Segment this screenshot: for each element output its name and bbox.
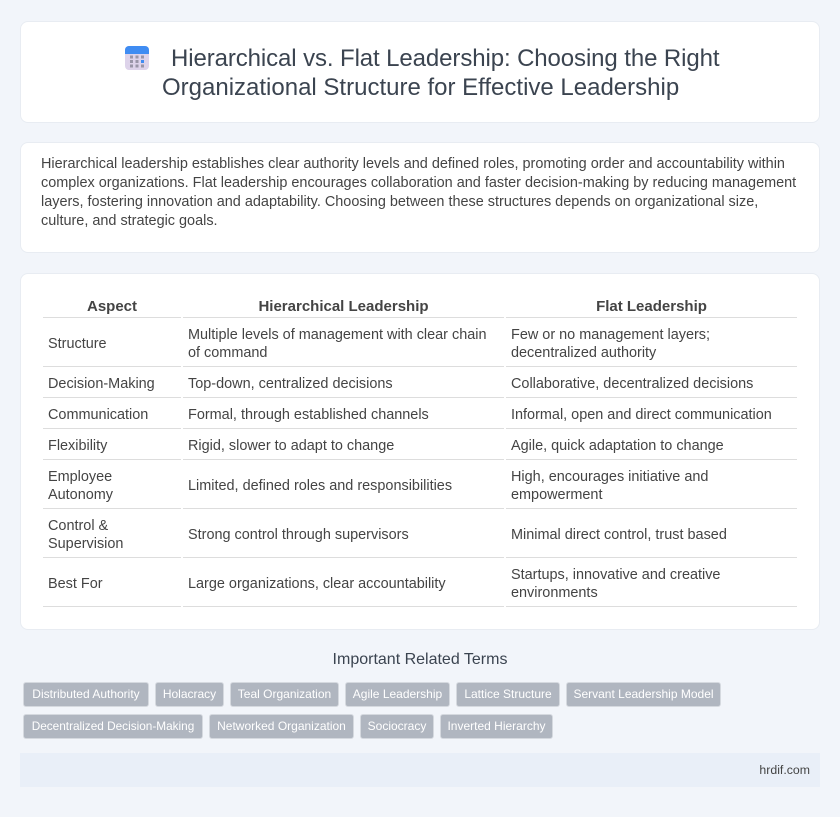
row: Best For: environments	[511, 585, 598, 601]
table header: Hierarchical Leadership	[258, 298, 429, 315]
table header	[87, 298, 707, 315]
row: Structure: Few or no management layers;	[511, 327, 710, 343]
row: Employee Autonomy: Limited, defined roles and responsibilities	[188, 478, 452, 494]
panel: introduction	[20, 142, 820, 253]
related terms tags: Decentralized Decision-Making	[32, 719, 194, 733]
related terms tags: Sociocracy	[368, 719, 426, 733]
row: Best For: Large organizations, clear accountability	[188, 576, 446, 592]
row: Flexibility: Agile, quick adaptation to change	[511, 438, 724, 454]
related terms tags: Distributed Authority	[32, 687, 140, 701]
row: Control & Supervision: Supervision	[48, 536, 123, 552]
row: Communication	[48, 407, 772, 423]
row: Flexibility	[48, 438, 724, 454]
row: Employee Autonomy: Autonomy	[48, 487, 113, 503]
text: Hierarchical vs. Flat Leadership: Choosing the Right	[171, 45, 719, 72]
panel: title card	[20, 21, 820, 123]
related terms tags: Networked Organization	[217, 719, 346, 733]
text: Organizational Structure for Effective Leadership	[162, 74, 679, 101]
row: Communication: Formal, through established channels	[188, 407, 429, 423]
panel: comparison table	[20, 273, 820, 630]
related terms tags: Inverted Hierarchy	[447, 719, 546, 733]
related terms tags: Lattice Structure	[464, 687, 552, 701]
row: Decision-Making: Decision-Making	[48, 376, 155, 392]
related terms tags: Agile Leadership	[353, 687, 442, 701]
row: Structure: Structure	[48, 336, 107, 352]
row: Communication: Communication	[48, 407, 148, 423]
row: Structure	[48, 327, 710, 361]
row: Best For: Best For	[48, 576, 103, 592]
related terms tags	[23, 682, 721, 739]
row: Best For	[48, 567, 720, 601]
table header: Flat Leadership	[596, 298, 707, 315]
row: Control & Supervision: Control &	[48, 518, 108, 534]
row: Control & Supervision	[48, 518, 727, 552]
row: Structure: Multiple levels of management with clear chain	[188, 327, 487, 343]
row: Flexibility: Rigid, slower to adapt to change	[188, 438, 394, 454]
row: Control & Supervision: Minimal direct control, trust based	[511, 527, 727, 543]
footer source: hrdif.com	[759, 763, 810, 777]
related terms tags: Servant Leadership Model	[573, 687, 714, 701]
row: Flexibility: Flexibility	[48, 438, 107, 454]
related terms tags: Holacracy	[163, 687, 216, 701]
row: Best For: Startups, innovative and creative	[511, 567, 720, 583]
table header: Aspect	[87, 298, 137, 315]
intro text: complex organizations. Flat leadership encourages collaboration and faster decision-making by reducing management	[41, 175, 796, 191]
heading: related terms: Important Related Terms	[333, 651, 507, 668]
footer bar	[20, 753, 820, 787]
row: Employee Autonomy: High, encourages initiative and	[511, 469, 708, 485]
row: Structure: decentralized authority	[511, 345, 656, 361]
row: Decision-Making: Top-down, centralized decisions	[188, 376, 393, 392]
intro text	[41, 156, 796, 229]
title	[162, 45, 720, 101]
intro text: layers, fostering innovation and adaptability. Choosing between these structures depends on organizational size,	[41, 194, 758, 210]
row: Communication: Informal, open and direct communication	[511, 407, 772, 423]
row: Control & Supervision: Strong control through supervisors	[188, 527, 409, 543]
icon: calendar	[125, 46, 149, 70]
row: Decision-Making	[48, 376, 753, 392]
row: Decision-Making: Collaborative, decentralized decisions	[511, 376, 753, 392]
row: Employee Autonomy: empowerment	[511, 487, 602, 503]
row: Structure: of command	[188, 345, 267, 361]
row: Employee Autonomy	[48, 469, 708, 503]
intro text: Hierarchical leadership establishes clear authority levels and defined roles, promoting order and accountability within	[41, 156, 785, 172]
row: Employee Autonomy: Employee	[48, 469, 112, 485]
intro text: culture, and strategic goals.	[41, 213, 218, 229]
related terms tags: Teal Organization	[238, 687, 331, 701]
